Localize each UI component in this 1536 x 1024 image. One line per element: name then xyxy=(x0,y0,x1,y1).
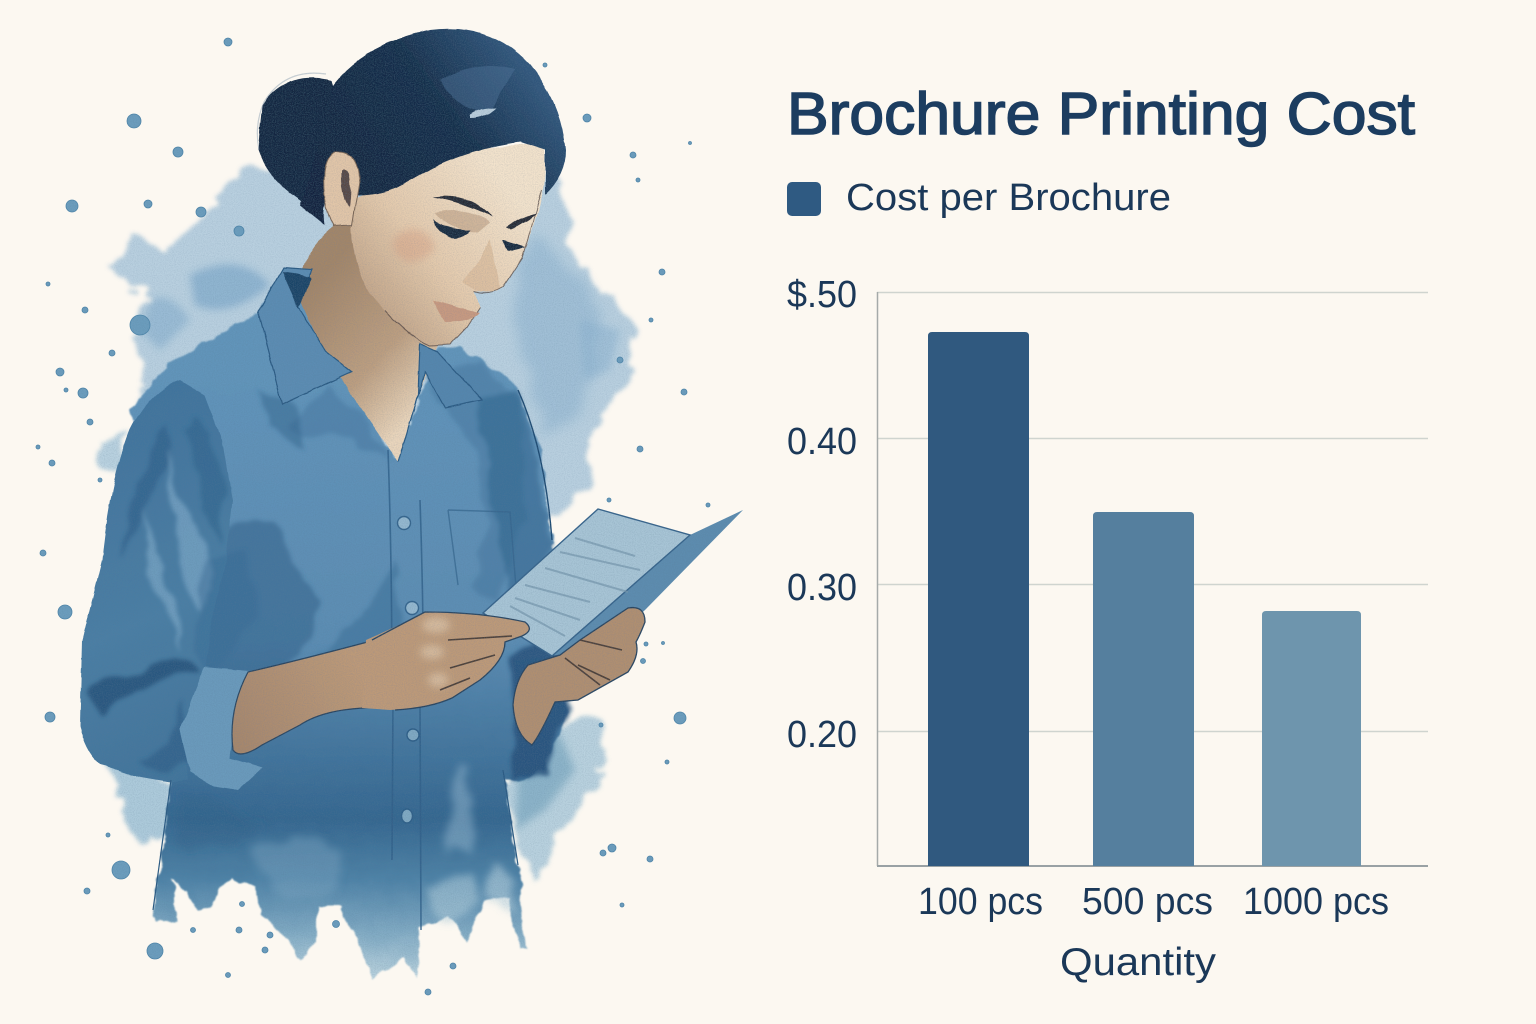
ear xyxy=(324,152,360,226)
hair bun xyxy=(257,73,341,210)
y axis labels: 0.30 xyxy=(787,567,857,609)
left sleeve xyxy=(80,380,232,782)
knuckle highlights xyxy=(420,617,450,687)
x axis labels: 500 pcs xyxy=(1082,881,1213,923)
y axis labels: $.50 xyxy=(787,274,857,316)
nose xyxy=(462,240,500,292)
x axis labels xyxy=(918,881,1389,923)
torso shadows xyxy=(202,360,568,780)
cheek xyxy=(393,229,433,261)
watercolor splash background xyxy=(88,170,636,874)
legend xyxy=(787,177,1171,219)
legend label: Cost per Brochure xyxy=(846,177,1171,219)
left forearm xyxy=(232,640,395,754)
hair main xyxy=(300,29,566,225)
legend swatch xyxy=(787,182,821,216)
eyebrows xyxy=(433,196,537,229)
shirt xyxy=(80,270,568,978)
hair shine xyxy=(440,66,515,112)
neck and chest xyxy=(300,215,440,462)
x axis labels: 1000 pcs xyxy=(1243,881,1389,923)
finger details xyxy=(440,636,622,690)
x axis labels: 100 pcs xyxy=(918,881,1043,923)
shirt body with lower wash and drips xyxy=(130,270,568,978)
y axis labels xyxy=(787,274,857,756)
lower shirt washes xyxy=(175,765,515,920)
left hand outline xyxy=(372,612,529,710)
eye shadow xyxy=(435,210,490,232)
bar: 500 pcs xyxy=(1093,512,1194,866)
illustration: woman reading a brochure xyxy=(36,29,743,995)
sleeve folds xyxy=(90,415,260,775)
y axis labels: 0.20 xyxy=(787,714,857,756)
bar chart xyxy=(787,274,1428,984)
x axis title: Quantity xyxy=(1060,941,1217,984)
hair highlight xyxy=(470,108,496,118)
splatter dots xyxy=(36,38,710,995)
left hand xyxy=(362,612,529,710)
title: Brochure Printing Cost xyxy=(787,81,1415,147)
collar xyxy=(258,268,482,462)
right hand xyxy=(513,608,645,745)
eyes xyxy=(433,218,525,251)
brochure xyxy=(483,509,743,656)
jaw line xyxy=(385,190,542,346)
face xyxy=(350,142,545,346)
head xyxy=(300,29,566,346)
bar: 100 pcs xyxy=(928,332,1029,866)
rolled cuff xyxy=(180,667,262,790)
lips xyxy=(433,300,480,322)
shirt placket lines and buttons xyxy=(153,390,552,930)
bar: 1000 pcs xyxy=(1262,611,1361,866)
y axis labels: 0.40 xyxy=(787,421,857,463)
